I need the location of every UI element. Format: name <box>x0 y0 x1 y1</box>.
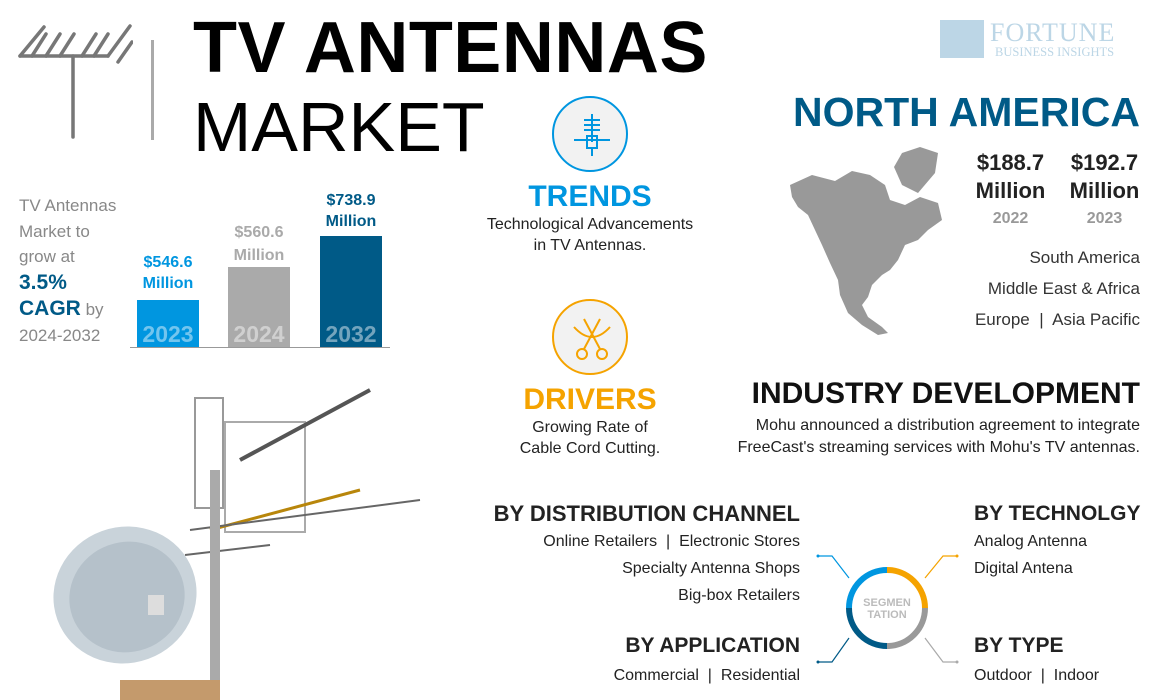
icon: drivers <box>552 299 628 375</box>
bar chart: Million <box>234 247 284 264</box>
text: other regions: Middle East & Africa <box>988 279 1140 298</box>
bar chart: Million <box>326 213 376 230</box>
panel: by technology: BY TECHNOLGY <box>974 502 1140 525</box>
panel: industry development: Mohu announced a distribution agreement to integrate <box>756 417 1140 434</box>
heading: drivers: DRIVERS <box>523 383 657 416</box>
panel: by technology: Analog Antenna <box>974 533 1087 550</box>
image: antenna and dish <box>54 388 420 700</box>
panel: by type <box>974 634 1099 684</box>
logo: fortune business insights: FORTUNE <box>990 18 1115 47</box>
panel: by application <box>614 634 800 684</box>
bar chart: Million <box>143 275 193 292</box>
text: $192.7 <box>1071 150 1138 175</box>
logo: fortune business insights <box>940 18 1115 59</box>
bar chart: 2024 <box>233 321 285 347</box>
text: CAGR: TV Antennas <box>19 196 116 215</box>
text: 2023 <box>1087 210 1122 227</box>
panel: by application: BY APPLICATION <box>625 634 800 657</box>
icon: antenna logo <box>18 24 133 139</box>
title: MARKET <box>193 88 485 166</box>
logo: fortune business insights: BUSINESS INSIGHTS <box>995 45 1114 59</box>
panel: drivers <box>520 299 660 457</box>
divider <box>151 40 154 140</box>
bar chart <box>130 192 390 348</box>
panel: by distribution channel: Specialty Antenna Shops <box>622 560 800 577</box>
panel: by distribution channel <box>494 501 800 604</box>
panel: trends: Technological Advancements <box>487 216 693 233</box>
chart: segmentation ring: TATION <box>867 609 907 621</box>
bar chart: $738.9 <box>327 192 375 209</box>
title <box>193 8 708 166</box>
text: CAGR: CAGR by <box>19 297 104 320</box>
text: CAGR: Market to <box>19 222 90 240</box>
panel: trends <box>487 96 693 254</box>
icon: trends <box>552 96 628 172</box>
panel: drivers: Cable Cord Cutting. <box>520 440 660 457</box>
panel: by distribution channel: Big-box Retailers <box>678 587 800 604</box>
text: other regions <box>975 248 1140 329</box>
text: other regions: Europe | Asia Pacific <box>975 310 1140 329</box>
panel: by type: BY TYPE <box>974 634 1063 657</box>
text: Million <box>1070 178 1139 203</box>
chart: segmentation ring: SEGMEN <box>863 597 911 609</box>
heading: trends: TRENDS <box>528 180 652 213</box>
panel: by distribution channel: BY DISTRIBUTION CHANNEL <box>494 501 800 526</box>
title: TV ANTENNAS <box>193 8 708 88</box>
text: CAGR: 2024-2032 <box>19 326 100 344</box>
panel: industry development <box>738 377 1140 456</box>
panel: by technology <box>974 502 1140 577</box>
panel: by distribution channel: Online Retailers | Electronic Stores <box>543 533 800 550</box>
heading: north america: NORTH AMERICA <box>793 89 1140 135</box>
bar chart: 2023 <box>142 321 194 347</box>
bar chart: $560.6 <box>235 224 283 241</box>
stats: north america: 2022 <box>993 210 1028 227</box>
panel: by technology: Digital Antena <box>974 560 1073 577</box>
text: other regions: South America <box>1029 248 1140 267</box>
panel: by application: Commercial | Residential <box>614 667 800 684</box>
text: CAGR <box>19 196 116 344</box>
bar chart: 2032 <box>325 321 377 347</box>
stats: north america: $188.7 <box>977 150 1044 175</box>
text: CAGR: 3.5% <box>19 270 67 294</box>
panel: trends: in TV Antennas. <box>534 237 646 254</box>
stats: north america: Million <box>976 178 1045 203</box>
panel: drivers: Growing Rate of <box>532 419 648 436</box>
chart: segmentation ring <box>816 554 958 664</box>
bar chart: $546.6 <box>144 254 192 271</box>
stats: north america <box>976 150 1045 227</box>
map: north america <box>790 147 942 335</box>
panel: industry development: INDUSTRY DEVELOPMENT <box>752 377 1140 410</box>
text: CAGR: grow at <box>19 247 75 266</box>
panel: industry development: FreeCast's streaming services with Mohu's TV antennas. <box>738 439 1140 456</box>
panel: by type: Outdoor | Indoor <box>974 667 1099 684</box>
